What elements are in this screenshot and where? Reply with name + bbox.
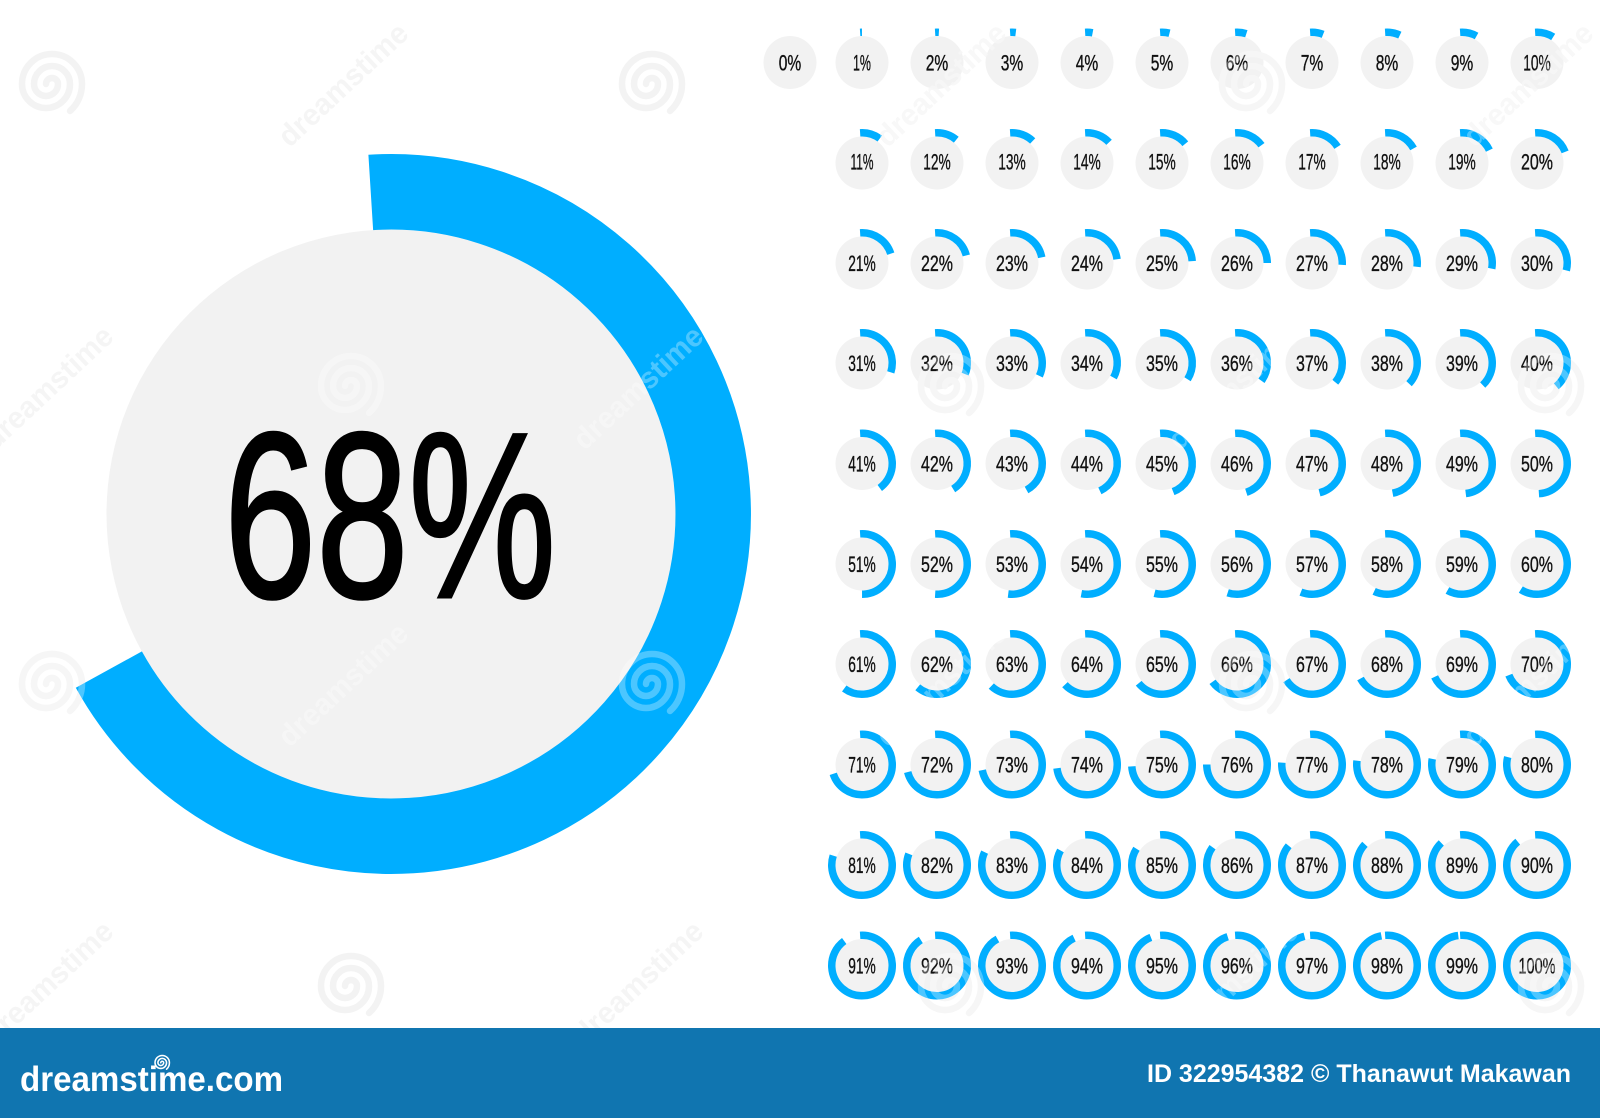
gauge 89% xyxy=(1430,833,1494,897)
gauge 3% xyxy=(980,30,1044,95)
gauge 54% xyxy=(1055,532,1119,596)
gauge 20% xyxy=(1505,131,1569,195)
gauge 32% xyxy=(905,331,969,395)
gauge 78% xyxy=(1355,732,1419,797)
gauge 65%: 65% xyxy=(1146,652,1178,677)
footer logo text: dreamstime.com xyxy=(20,1060,283,1099)
gauge 4%: 4% xyxy=(1076,50,1098,76)
gauge 44% xyxy=(1055,431,1119,496)
gauge 20%: 20% xyxy=(1521,150,1553,174)
gauge 61%: 61% xyxy=(848,652,876,677)
gauge 31% xyxy=(830,331,894,395)
gauge 73% xyxy=(980,732,1044,797)
gauge 93% xyxy=(980,933,1044,998)
gauge 23% xyxy=(980,231,1044,295)
gauge 29%: 29% xyxy=(1446,251,1478,276)
gauge 69%: 69% xyxy=(1446,652,1478,677)
gauge 18% xyxy=(1355,131,1419,195)
gauge 55% xyxy=(1130,532,1194,596)
gauge 80%: 80% xyxy=(1521,752,1553,778)
gauge 25%: 25% xyxy=(1146,251,1178,276)
gauge 67% xyxy=(1280,632,1344,696)
gauge 67%: 67% xyxy=(1296,652,1328,677)
gauge 32%: 32% xyxy=(921,351,953,376)
watermark overlay: dreamstime xyxy=(567,320,710,456)
gauge 14%: 14% xyxy=(1073,150,1101,174)
gauge 96%: 96% xyxy=(1221,954,1253,978)
gauge 50%: 50% xyxy=(1521,452,1553,476)
gauge 72% xyxy=(905,732,969,797)
gauge 53%: 53% xyxy=(996,552,1028,577)
gauge 62%: 62% xyxy=(921,652,953,677)
gauge 93%: 93% xyxy=(996,954,1028,978)
gauge 62% xyxy=(905,632,969,696)
gauge 43% xyxy=(980,431,1044,496)
gauge 45% xyxy=(1130,431,1194,496)
gauge 41% xyxy=(830,431,894,496)
gauge 59% xyxy=(1430,532,1494,596)
gauge 100%: 100% xyxy=(1518,954,1556,978)
gauge 14% xyxy=(1055,131,1119,195)
gauge 64%: 64% xyxy=(1071,652,1103,677)
gauge 29% xyxy=(1430,231,1494,295)
gauge 21% xyxy=(830,231,894,295)
gauge 46%: 46% xyxy=(1221,452,1253,476)
gauge 36% xyxy=(1205,331,1269,395)
gauge 21%: 21% xyxy=(848,251,876,276)
gauge 31%: 31% xyxy=(848,351,876,376)
gauge 39% xyxy=(1430,331,1494,395)
gauge 33%: 33% xyxy=(996,351,1028,376)
gauge 55%: 55% xyxy=(1146,552,1178,577)
gauge 9% xyxy=(1430,30,1494,95)
gauge 78%: 78% xyxy=(1371,752,1403,778)
gauge 73%: 73% xyxy=(996,752,1028,778)
gauge 48% xyxy=(1355,431,1419,496)
gauge 70%: 70% xyxy=(1521,652,1553,677)
gauge 86%: 86% xyxy=(1221,853,1253,878)
gauge 1% xyxy=(830,30,894,95)
gauge 65% xyxy=(1130,632,1194,696)
gauge 81% xyxy=(830,833,894,897)
gauge 70% xyxy=(1505,632,1569,696)
gauge 23%: 23% xyxy=(996,251,1028,276)
gauge 75%: 75% xyxy=(1146,752,1178,778)
gauge 30% xyxy=(1505,231,1569,295)
gauge 82% xyxy=(905,833,969,897)
watermark layer on white background: dreamstime xyxy=(870,17,1013,153)
gauge 89%: 89% xyxy=(1446,853,1478,878)
gauge 15%: 15% xyxy=(1148,150,1176,174)
gauge 18%: 18% xyxy=(1373,150,1401,174)
gauge 84% xyxy=(1055,833,1119,897)
gauge 41%: 41% xyxy=(848,452,876,476)
gauge 88%: 88% xyxy=(1371,853,1403,878)
watermark layer on white background: dreamstime xyxy=(567,320,710,456)
gauge 26%: 26% xyxy=(1221,251,1253,276)
gauge 10% xyxy=(1505,30,1569,95)
watermark overlay: dreamstime xyxy=(1162,320,1305,456)
watermark overlay: dreamstime xyxy=(1457,17,1600,153)
gauge 86% xyxy=(1205,833,1269,897)
gauge 5%: 5% xyxy=(1151,50,1173,76)
gauge 60%: 60% xyxy=(1521,552,1553,577)
gauge 17%: 17% xyxy=(1298,150,1326,174)
gauge 2%: 2% xyxy=(926,50,948,76)
gauge 80% xyxy=(1505,732,1569,797)
gauge 40%: 40% xyxy=(1521,351,1553,376)
gauge 83% xyxy=(980,833,1044,897)
watermark layer on white background: dreamstime xyxy=(272,617,415,753)
gauge 58%: 58% xyxy=(1371,552,1403,577)
gauge 99%: 99% xyxy=(1446,954,1478,978)
gauge 22% xyxy=(905,231,969,295)
gauge 79% xyxy=(1430,732,1494,797)
gauge 12%: 12% xyxy=(923,150,951,174)
large gauge: 68% xyxy=(49,172,733,856)
gauge 16% xyxy=(1205,131,1269,195)
watermark layer on white background: dreamstime xyxy=(1457,17,1600,153)
gauge 83%: 83% xyxy=(996,853,1028,878)
gauge 19%: 19% xyxy=(1448,150,1476,174)
gauge 42%: 42% xyxy=(921,452,953,476)
gauge 84%: 84% xyxy=(1071,853,1103,878)
gauge 81%: 81% xyxy=(848,853,876,878)
gauge 40% xyxy=(1505,331,1569,395)
gauge 61% xyxy=(830,632,894,696)
gauge 0% xyxy=(764,36,816,89)
gauge 0%: 0% xyxy=(779,50,801,76)
gauge 76% xyxy=(1205,732,1269,797)
gauge 4% xyxy=(1055,30,1119,95)
gauge 6%: 6% xyxy=(1226,50,1248,76)
gauge 74% xyxy=(1055,732,1119,797)
gauge 77%: 77% xyxy=(1296,752,1328,778)
gauge 75% xyxy=(1130,732,1194,797)
gauge 48%: 48% xyxy=(1371,452,1403,476)
gauge 24% xyxy=(1055,231,1119,295)
gauge 33% xyxy=(980,331,1044,395)
gauge 16%: 16% xyxy=(1223,150,1251,174)
gauge 11%: 11% xyxy=(850,150,874,174)
gauge 37%: 37% xyxy=(1296,351,1328,376)
gauge 49% xyxy=(1430,431,1494,496)
gauge 71%: 71% xyxy=(848,752,876,778)
watermark overlay: dreamstime xyxy=(1162,915,1305,1051)
gauge 98% xyxy=(1355,933,1419,998)
gauge 60% xyxy=(1505,532,1569,596)
gauge 11% xyxy=(830,131,894,195)
gauge 44%: 44% xyxy=(1071,452,1103,476)
gauge 53% xyxy=(980,532,1044,596)
gauge 28% xyxy=(1355,231,1419,295)
gauge 66% xyxy=(1205,632,1269,696)
gauge 99% xyxy=(1430,933,1494,998)
watermark layer on white background: dreamstime xyxy=(272,17,415,153)
gauge 50% xyxy=(1505,431,1569,496)
gauge 15% xyxy=(1130,131,1194,195)
gauge 45%: 45% xyxy=(1146,452,1178,476)
watermark layer on white background: dreamstime xyxy=(567,915,710,1051)
gauge 56% xyxy=(1205,532,1269,596)
gauge 3%: 3% xyxy=(1001,50,1023,76)
gauge 92%: 92% xyxy=(921,954,953,978)
gauge 38% xyxy=(1355,331,1419,395)
gauge 28%: 28% xyxy=(1371,251,1403,276)
large gauge blue arc xyxy=(49,172,733,856)
gauge 95% xyxy=(1130,933,1194,998)
gauge 27%: 27% xyxy=(1296,251,1328,276)
gauge 51% xyxy=(830,532,894,596)
gauge 7%: 7% xyxy=(1301,50,1323,76)
gauge 56%: 56% xyxy=(1221,552,1253,577)
gauge 69% xyxy=(1430,632,1494,696)
gauge 71% xyxy=(830,732,894,797)
gauge 2% xyxy=(905,30,969,95)
gauge 94%: 94% xyxy=(1071,954,1103,978)
gauge 8%: 8% xyxy=(1376,50,1398,76)
gauge 43%: 43% xyxy=(996,452,1028,476)
watermark overlay: dreamstime xyxy=(272,617,415,753)
gauge 25% xyxy=(1130,231,1194,295)
gauge 76%: 76% xyxy=(1221,752,1253,778)
gauge 88% xyxy=(1355,833,1419,897)
large gauge background disc xyxy=(106,230,676,798)
gauge 79%: 79% xyxy=(1446,752,1478,778)
gauge 59%: 59% xyxy=(1446,552,1478,577)
gauge 57%: 57% xyxy=(1296,552,1328,577)
gauge 39%: 39% xyxy=(1446,351,1478,376)
gauge 85% xyxy=(1130,833,1194,897)
icon: logo spiral xyxy=(155,1056,169,1069)
gauge 66%: 66% xyxy=(1221,652,1253,677)
gauge 97% xyxy=(1280,933,1344,998)
gauge 12% xyxy=(905,131,969,195)
gauge 87% xyxy=(1280,833,1344,897)
gauge 9%: 9% xyxy=(1451,50,1473,76)
gauge 64% xyxy=(1055,632,1119,696)
gauge 42% xyxy=(905,431,969,496)
gauge 98%: 98% xyxy=(1371,954,1403,978)
gauge 63% xyxy=(980,632,1044,696)
gauge 52% xyxy=(905,532,969,596)
watermark overlay: dreamstime xyxy=(870,17,1013,153)
gauge 63%: 63% xyxy=(996,652,1028,677)
gauge 19% xyxy=(1430,131,1494,195)
gauge 26% xyxy=(1205,231,1269,295)
gauge 35% xyxy=(1130,331,1194,395)
gauge 100% xyxy=(1505,933,1569,998)
gauge 95%: 95% xyxy=(1146,954,1178,978)
grid of small gauges 0-100% xyxy=(764,30,1569,998)
gauge 57% xyxy=(1280,532,1344,596)
gauge 37% xyxy=(1280,331,1344,395)
gauge 68% xyxy=(1355,632,1419,696)
gauge 94% xyxy=(1055,933,1119,998)
gauge 87%: 87% xyxy=(1296,853,1328,878)
gauge 91% xyxy=(830,933,894,998)
gauge 1%: 1% xyxy=(853,50,871,76)
gauge 35%: 35% xyxy=(1146,351,1178,376)
gauge 52%: 52% xyxy=(921,552,953,577)
gauge 13%: 13% xyxy=(998,150,1026,174)
gauge 90% xyxy=(1505,833,1569,897)
gauge 30%: 30% xyxy=(1521,251,1553,276)
gauge 85%: 85% xyxy=(1146,853,1178,878)
gauge 13% xyxy=(980,131,1044,195)
gauge 38%: 38% xyxy=(1371,351,1403,376)
gauge 6% xyxy=(1205,30,1269,95)
watermark overlay: dreamstime xyxy=(870,617,1013,753)
gauge 92% xyxy=(905,933,969,998)
gauge 34%: 34% xyxy=(1071,351,1103,376)
gauge 90%: 90% xyxy=(1521,853,1553,878)
gauge 74%: 74% xyxy=(1071,752,1103,778)
large gauge value: 68% xyxy=(224,384,556,648)
gauge 68%: 68% xyxy=(1371,652,1403,677)
gauge 36%: 36% xyxy=(1221,351,1253,376)
gauge 27% xyxy=(1280,231,1344,295)
gauge 54%: 54% xyxy=(1071,552,1103,577)
gauge 46% xyxy=(1205,431,1269,496)
footer credit text: ID 322954382 © Thanawut Makawan xyxy=(1147,1060,1571,1088)
gauge 24%: 24% xyxy=(1071,251,1103,276)
gauge 7% xyxy=(1280,30,1344,95)
gauge 34% xyxy=(1055,331,1119,395)
gauge 91%: 91% xyxy=(848,954,876,978)
gauge 47%: 47% xyxy=(1296,452,1328,476)
gauge 96% xyxy=(1205,933,1269,998)
gauge 97%: 97% xyxy=(1296,954,1328,978)
gauge 82%: 82% xyxy=(921,853,953,878)
gauge 51%: 51% xyxy=(848,552,876,577)
gauge 58% xyxy=(1355,532,1419,596)
gauge 22%: 22% xyxy=(921,251,953,276)
gauge 17% xyxy=(1280,131,1344,195)
gauge 49%: 49% xyxy=(1446,452,1478,476)
watermark overlay: dreamstime xyxy=(1457,617,1600,753)
footer bar xyxy=(0,1028,1600,1118)
gauge 47% xyxy=(1280,431,1344,496)
gauge 72%: 72% xyxy=(921,752,953,778)
gauge 8% xyxy=(1355,30,1419,95)
gauge 77% xyxy=(1280,732,1344,797)
gauge 10%: 10% xyxy=(1523,50,1551,76)
gauge 5% xyxy=(1130,30,1194,95)
